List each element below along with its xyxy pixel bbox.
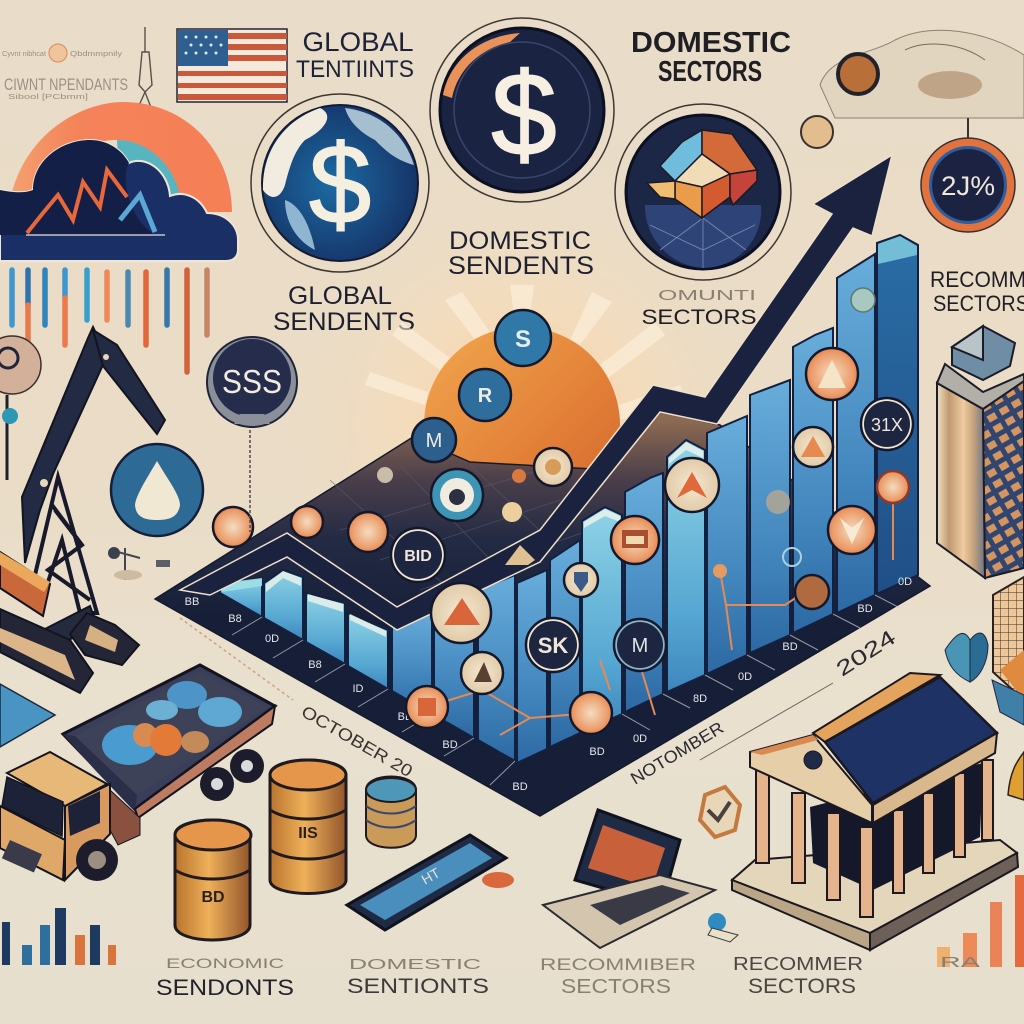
arrow: trend line — [180, 155, 892, 630]
icon: right lens — [992, 680, 1024, 800]
chart axis strip: 0D — [898, 576, 912, 588]
coin: orange box — [611, 516, 659, 564]
heading: domestic sendents — [448, 227, 594, 280]
chart: bar caps — [222, 236, 917, 637]
dot: orange small — [512, 469, 526, 483]
chart axis strip: BD — [782, 641, 798, 653]
faded text: top-left label — [2, 44, 128, 101]
coin: faded tan — [766, 490, 790, 514]
icon: bank building — [732, 673, 1018, 950]
heading: global sentiments top: TENTIINTS — [296, 56, 414, 83]
coin: shield — [564, 563, 598, 597]
icon: laptop — [543, 810, 715, 948]
icon: tablet: HT — [418, 864, 443, 888]
coin: triangle mid — [793, 427, 833, 467]
icons: coins on chart — [213, 288, 913, 734]
chart: orange connector lines — [427, 503, 893, 735]
coin: bid: BID — [404, 548, 432, 565]
coin: blue top — [495, 310, 551, 366]
coin: sk — [526, 618, 580, 672]
icon: small blue tag — [708, 913, 738, 942]
coin: brown — [795, 575, 829, 609]
heading: domestic sendents: SENDENTS — [448, 252, 594, 280]
coin: teal thumb — [431, 469, 483, 521]
icon: sss badge: SSS — [222, 363, 282, 400]
chart: bottom-right mini bars — [937, 875, 1024, 967]
coin: 31x: 31X — [871, 415, 903, 435]
chart axis strip: 0D — [265, 633, 279, 645]
icon: sss badge — [207, 337, 297, 532]
heading: domestic sectors — [631, 27, 791, 88]
text: november 2024 label: 2024 — [832, 626, 900, 681]
coin: bottom left orange — [406, 686, 448, 728]
coin: bird — [461, 652, 503, 694]
caption: recommer sectors: RECOMMER — [733, 954, 863, 974]
icon: oil barrels: BD — [201, 889, 225, 906]
icon: oil drop pendant — [111, 444, 203, 536]
callout: percent badge — [921, 118, 1015, 232]
chart axis strip: BD — [442, 739, 458, 751]
icon: american flag — [177, 29, 287, 102]
chart: grid on platform — [330, 465, 590, 590]
coin: tan — [534, 448, 572, 486]
icon: blue leaf — [945, 633, 988, 682]
coin: bottom mid orange — [570, 692, 612, 734]
coin: sk: SK — [538, 633, 568, 658]
heading: recommended sectors right — [930, 267, 1024, 316]
text: november 2024 label — [627, 626, 900, 788]
caption: sendonts — [156, 955, 294, 1000]
caption: recommender sectors — [540, 955, 696, 998]
heading: global sendents: GLOBAL — [288, 282, 392, 310]
heading: global sentiments top — [296, 27, 414, 83]
caption: sentionts — [347, 956, 489, 998]
caption: recommer sectors — [733, 954, 863, 998]
icon: rainbow storm cloud — [0, 102, 238, 261]
icon: small trinket — [700, 787, 740, 837]
caption: sendonts: ECONOMIC — [166, 955, 284, 971]
coin: small right — [877, 471, 909, 503]
coin: blue m — [412, 418, 456, 462]
coin: m — [614, 619, 666, 671]
object: cone — [505, 545, 535, 565]
chart axis strip: ID — [352, 683, 364, 695]
caption: recommer sectors: SECTORS — [748, 975, 856, 998]
caption: recommender sectors: SECTORS — [561, 976, 671, 998]
coin: arrow triangle — [665, 458, 719, 512]
heading: community sectors: OMUNTI — [658, 287, 756, 304]
text: november 2024 label: NOTOMBER — [627, 718, 727, 788]
faded text: top-left label: Cyvnt nibhcat — [2, 51, 46, 58]
caption: recommender sectors: RECOMMIBER — [540, 955, 696, 974]
sun with rays — [365, 285, 685, 523]
caption: right edge label: RA — [940, 954, 980, 971]
icon: coin stack — [366, 776, 416, 848]
coin: orange three — [348, 512, 388, 552]
icon: skyscraper — [937, 326, 1024, 578]
chart axis strip: BB — [398, 711, 412, 723]
icon: globe with dollar — [251, 94, 429, 272]
heading: global sendents — [273, 282, 415, 336]
icon: small pump sketch — [108, 547, 170, 580]
chart: rain bars — [12, 270, 207, 372]
chart platform — [155, 412, 930, 816]
coin: pale top — [851, 288, 875, 312]
icon: tablet — [347, 835, 514, 930]
coin: blue r — [459, 369, 511, 421]
coin: blue top: S — [515, 326, 531, 353]
chart axis strip: 0D — [738, 671, 752, 683]
caption: sentionts: SENTIONTS — [347, 975, 489, 998]
icon: top right cloud sketch — [801, 30, 1024, 148]
heading: domestic sendents: DOMESTIC — [449, 227, 591, 255]
text: october label — [180, 618, 416, 781]
icon: oil barrels: IIS — [298, 825, 318, 842]
chart axis strip: BD — [857, 603, 873, 615]
chart axis strip: BB — [185, 596, 199, 608]
icon: oil rig excavator — [0, 327, 165, 693]
caption: sentionts: DOMESTIC — [349, 956, 481, 973]
heading: community sectors — [642, 287, 756, 329]
coin: blue m: M — [426, 430, 442, 452]
chart: blue bar chart — [220, 235, 918, 763]
icon: left badge — [0, 336, 41, 480]
dot: cream small — [502, 502, 522, 522]
coin: triangle upper — [806, 348, 858, 400]
dot: grey — [377, 467, 393, 483]
icon: right building grid — [993, 577, 1024, 700]
chart axis strip: B8 — [228, 613, 242, 625]
chart axis strip: 8D — [693, 693, 707, 705]
coin: orange one — [213, 507, 253, 547]
callout: percent badge: 2J% — [941, 171, 995, 201]
icon: hanging hook — [136, 27, 158, 165]
icon: oil barrels — [175, 760, 346, 940]
icon: sector cube globe — [615, 104, 791, 280]
caption: sendonts: SENDONTS — [156, 975, 294, 1000]
chart: bottom-left mini bars — [2, 908, 116, 965]
coin: v — [828, 506, 876, 554]
icon: globe with dollar: $ — [309, 122, 371, 247]
coin: tent — [431, 583, 491, 643]
coin: 31x — [861, 398, 913, 450]
heading: global sentiments top: GLOBAL — [302, 27, 414, 57]
coin: blue r: R — [478, 385, 493, 407]
coin: m: M — [632, 635, 648, 657]
heading: domestic sectors: DOMESTIC — [631, 27, 791, 59]
heading: domestic sectors: SECTORS — [658, 56, 762, 88]
heading: global sendents: SENDENTS — [273, 308, 415, 336]
icon: dollar coin: $ — [491, 49, 557, 181]
chart axis strip: B8 — [308, 659, 322, 671]
chart axis strip: BD — [512, 781, 528, 793]
dot: orange node — [713, 564, 727, 578]
faded text: top-left label: Qbdmmpnily — [70, 51, 123, 58]
faded text: top-left label: Sibool [PCbmm] — [8, 94, 88, 101]
icon: left teal card — [0, 684, 55, 747]
icon: dump truck — [0, 665, 275, 881]
heading: community sectors: SECTORS — [642, 306, 756, 329]
chart axis strip: BD — [589, 746, 605, 758]
text: october label: OCTOBER 20 — [298, 702, 416, 781]
chart axis strip — [185, 576, 912, 793]
coin: faded swirl — [783, 548, 801, 566]
icon: dollar coin — [430, 18, 614, 202]
chart axis strip: 0D — [633, 733, 647, 745]
faded text: top-left label: CIWNT NPENDANTS — [4, 75, 128, 94]
coin: orange two — [291, 506, 323, 538]
coin: bid — [391, 528, 445, 582]
